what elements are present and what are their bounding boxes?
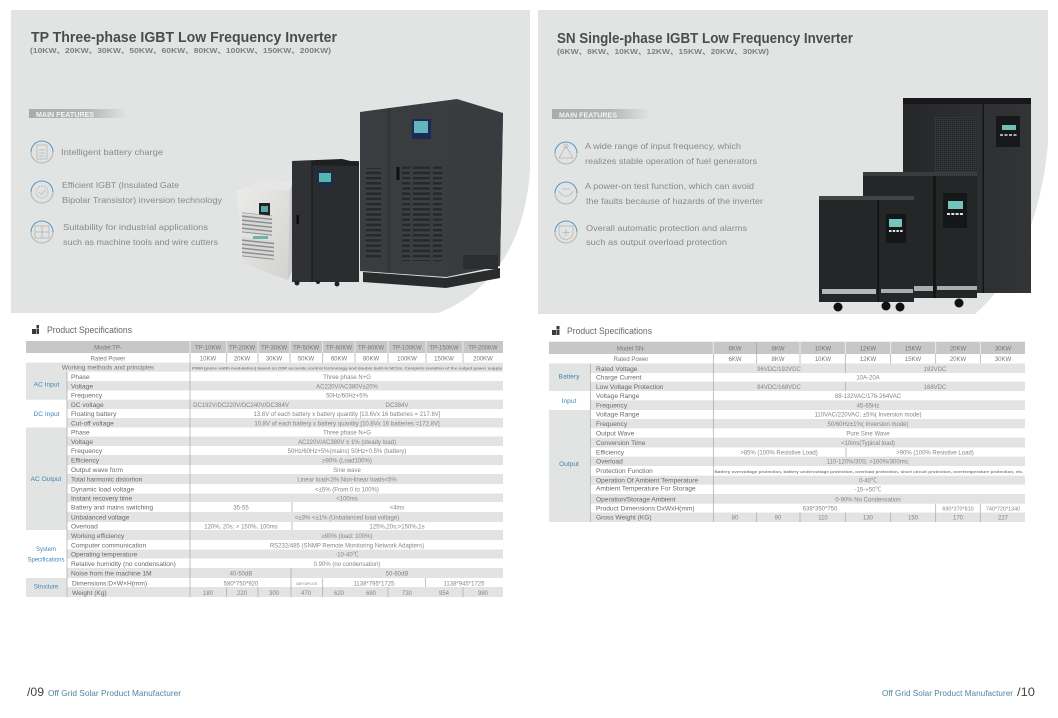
values: TP table: Linear load<3% Non-linear loads<5% bbox=[297, 478, 397, 484]
values: TP table: 980 bbox=[478, 591, 489, 597]
text: feature 3 right: Overall automatic protection and alarms bbox=[586, 223, 747, 233]
table header row: TP models: TP-200KW bbox=[468, 346, 498, 352]
row: rated power: 200KW bbox=[473, 356, 493, 362]
values: TP table: 40-50dB bbox=[230, 572, 252, 578]
text: feature 3 right: such as output overload protection bbox=[586, 237, 727, 247]
values: SN table: -15-+50℃ bbox=[855, 486, 881, 494]
row: rated power SN: 20KW bbox=[950, 357, 967, 363]
panel: TP three-phase inverter hero bbox=[11, 10, 530, 313]
group label: Input: Input bbox=[562, 398, 576, 405]
panel: SN single-phase inverter hero bbox=[538, 10, 1048, 314]
values: SN table: 96VDC/192VDC bbox=[757, 367, 802, 373]
text: feature 2 right: the faults because of hazards of the inverter bbox=[586, 196, 763, 206]
item labels: TP table: Efficiency bbox=[71, 458, 100, 464]
row: rated power SN: 15KW bbox=[905, 357, 922, 363]
values: SN table: Pure Sine Wave bbox=[846, 432, 890, 438]
item labels: TP table: DC voltage bbox=[71, 402, 104, 409]
values: TP table: AC220V/AC380V±20% bbox=[316, 384, 378, 390]
item labels: TP table: Computer communication bbox=[71, 542, 146, 550]
values: TP table: 470 bbox=[301, 591, 312, 597]
values: SN table: 150 bbox=[908, 516, 919, 522]
subtitle: SN power range: (6KW、8KW、10KW、12KW、15KW、20KW、30KW) bbox=[557, 47, 770, 56]
image: medium black inverter bbox=[863, 172, 977, 308]
text: feature 1 right: realizes stable operation of fuel generators bbox=[585, 156, 757, 166]
item labels: TP table: Weight (Kg) bbox=[72, 590, 107, 597]
item labels: TP table: Voltage bbox=[71, 439, 93, 446]
table header row: TP models bbox=[26, 341, 503, 353]
item labels: SN table: Conversion Time bbox=[596, 440, 646, 447]
table header row: SN models: 30KW bbox=[995, 346, 1012, 352]
item labels: SN table: Efficiency bbox=[596, 450, 625, 456]
text: feature 2: Efficient IGBT (Insulated Gate bbox=[62, 180, 179, 190]
item labels: TP table: Working efficiency bbox=[71, 533, 125, 540]
panel background: left bbox=[11, 10, 530, 313]
values: SN table: 45-65Hz bbox=[857, 404, 879, 410]
values: SN table: 0-90% No Condensation bbox=[835, 498, 901, 504]
heading: product specifications left: Product Specifications bbox=[47, 325, 132, 335]
footer: right page number and tagline: Off Grid Solar Product Manufacturer bbox=[882, 689, 1013, 698]
group label: System Specifications bbox=[27, 547, 65, 564]
values: TP table: <±5% (From 0 to 100%) bbox=[315, 488, 379, 494]
values: SN table: 110 bbox=[818, 516, 828, 522]
text: feature 2 bbox=[62, 180, 223, 205]
values: TP table: Sine wave bbox=[333, 468, 362, 474]
group label: AC Input: AC Input bbox=[34, 382, 59, 388]
values: SN table: 0-40℃ bbox=[859, 478, 877, 484]
table header row: SN models: Model SN- bbox=[617, 346, 645, 352]
values: TP table: 1138*945*1725 bbox=[444, 582, 485, 588]
footer: right page number and tagline: /10 bbox=[1017, 685, 1035, 699]
table header row: SN models bbox=[549, 342, 1025, 354]
item labels: SN table: Frequency bbox=[596, 421, 628, 428]
values: TP table: 954 bbox=[439, 591, 450, 597]
group label: Output: Output bbox=[559, 461, 579, 468]
item labels: TP table: Battery and mains switching bbox=[71, 504, 153, 512]
values: TP table: 620 bbox=[334, 591, 345, 597]
item labels: TP table: Phase bbox=[71, 374, 90, 381]
values: TP table: 730 bbox=[402, 591, 413, 597]
values: TP table: ≥90% (load: 100%) bbox=[322, 534, 372, 540]
item labels: TP table: Frequency bbox=[71, 448, 103, 455]
table header row: SN models: 8KW bbox=[771, 346, 785, 352]
group label: AC Output: AC Output bbox=[31, 476, 62, 483]
panel background: right bbox=[538, 10, 1048, 314]
values: TP table: 35-55 bbox=[233, 506, 249, 512]
group label: System Specifications: System bbox=[36, 547, 56, 553]
item labels: TP table: Total harmonic distortion bbox=[71, 476, 143, 484]
table header row: TP models: TP-30KW bbox=[261, 346, 287, 352]
text: feature 2 right: A power-on test function, which can avoid bbox=[585, 181, 754, 191]
values: TP table bbox=[193, 375, 489, 597]
icon: battery charge bbox=[31, 141, 53, 163]
values: SN table: 130 bbox=[863, 516, 874, 522]
values: SN table: 80 bbox=[732, 516, 739, 522]
item labels: SN table: Operation Of Ambient Temperature bbox=[596, 478, 698, 484]
item labels: SN table: Voltage Range bbox=[596, 393, 640, 400]
item labels: TP table: Unbalanced voltage bbox=[71, 514, 130, 522]
table: SN specifications bbox=[549, 342, 1025, 522]
values: SN table: Battery overvoltage protection, battery undervoltage protection, overload protection, short circuit protection, overtemperature protection, etc. bbox=[714, 469, 1024, 474]
row: rated power SN: 10KW bbox=[815, 357, 832, 363]
item labels: SN table bbox=[596, 366, 698, 522]
item labels: TP table: Phase bbox=[71, 430, 90, 436]
item labels: TP table: Voltage bbox=[71, 383, 93, 390]
heading: product specifications right: Product Specifications bbox=[567, 326, 652, 336]
values: SN table: 227 bbox=[998, 516, 1009, 522]
item labels: TP table: Relative humidity (no condensation) bbox=[71, 561, 176, 568]
item labels: TP table: Operating temperature bbox=[71, 552, 138, 558]
table header row: TP models: TP-50KW bbox=[293, 346, 319, 352]
row: rated power: 150KW bbox=[434, 356, 454, 362]
row: rated power: 10KW bbox=[200, 356, 217, 362]
footer: right page number and tagline bbox=[882, 685, 1035, 699]
values: TP table: 50Hz/60Hz+5%(mains) 50Hz+0.5% (battery) bbox=[288, 449, 406, 455]
title: SN inverter: SN Single-phase IGBT Low Frequency Inverter bbox=[557, 30, 853, 47]
row: rated power: 80KW bbox=[363, 356, 380, 362]
values: TP table: 180 bbox=[203, 591, 214, 597]
values: TP table: Three phase N+G bbox=[323, 375, 371, 381]
values: SN table bbox=[714, 367, 1024, 522]
item labels: SN table: Low Voltage Protection bbox=[596, 384, 664, 391]
text: feature 1 right bbox=[585, 141, 757, 166]
table header row: SN models: 6KW bbox=[728, 346, 742, 352]
values: TP table: 580*750*920 bbox=[224, 582, 259, 588]
row: rated power SN: 6KW bbox=[728, 357, 742, 363]
values: SN table: 110VAC/220VAC; ±5%( Inversion mode) bbox=[814, 412, 922, 418]
text: feature 3: Suitability for industrial applications bbox=[63, 222, 208, 232]
heading: main features right: MAIN FEATURES bbox=[559, 112, 617, 119]
icon: gear bbox=[31, 181, 53, 203]
group label: System Specifications: Specifications bbox=[27, 558, 65, 564]
values: SN table: 110-120%/30S; >160%/300ms; bbox=[827, 460, 910, 466]
values: TP table: Three phase N+G bbox=[323, 430, 371, 436]
footer: left page number and tagline bbox=[27, 685, 181, 699]
item labels: SN table: Voltage Range bbox=[596, 412, 640, 418]
heading: main features left: MAIN FEATURES bbox=[36, 112, 94, 119]
values: TP table: <±3% <±1% (Unbalanced load voltage) bbox=[295, 516, 399, 522]
row: rated power: 50KW bbox=[298, 356, 315, 362]
text: feature 3: such as machine tools and wire cutters bbox=[63, 237, 218, 247]
item labels: TP table: Instant recovery time bbox=[71, 496, 133, 502]
table header row: SN models: 20KW bbox=[950, 346, 967, 352]
image: small black inverter bbox=[819, 196, 914, 312]
icon: shield bbox=[555, 221, 577, 243]
row: rated power SN: Rated Power bbox=[614, 357, 648, 363]
values: TP table: 300 bbox=[269, 591, 280, 597]
table header row: SN models: 12KW bbox=[860, 346, 877, 352]
item labels: TP table: Dynamic load voltage bbox=[71, 486, 134, 494]
icon: triangle nodes bbox=[555, 142, 577, 164]
table: TP specifications bbox=[26, 341, 503, 597]
values: SN table: 740*720*1340 bbox=[986, 506, 1020, 512]
values: TP table: 0.90% (no condensation) bbox=[314, 562, 380, 568]
values: SN table: 690*370*810 bbox=[942, 506, 974, 512]
row: rated power: 30KW bbox=[266, 356, 283, 362]
values: SN table: 90 bbox=[775, 516, 782, 522]
row: rated power: Rated Power bbox=[91, 356, 125, 362]
values: TP table: 125%,20s;>150%,1s bbox=[369, 524, 425, 530]
footer: left page number and tagline: /09 bbox=[27, 685, 44, 699]
icon: industrial bbox=[31, 221, 53, 243]
item labels: SN table: Rated Voltage bbox=[596, 366, 638, 373]
row: rated power bbox=[91, 353, 493, 363]
subtitle: TP power range: (10KW、20KW、30KW、50KW、60KW、80KW、100KW、150KW、200KW) bbox=[30, 46, 332, 55]
table header row: TP models: TP-20KW bbox=[229, 346, 255, 352]
text: feature 3 bbox=[63, 222, 218, 247]
table header row: SN models: 10KW bbox=[815, 346, 832, 352]
row: working methods bbox=[26, 363, 503, 372]
row: rated power SN: 12KW bbox=[860, 357, 877, 363]
values: TP table: 680 bbox=[366, 591, 377, 597]
values: TP table: 10.8V of each battery x battery quantity [10.8Vx 16 batteries =172.8V] bbox=[254, 422, 440, 428]
row: rated power: 60KW bbox=[331, 356, 348, 362]
item labels: SN table: Gross Weight (KG) bbox=[596, 515, 652, 522]
group backgrounds and alternating rows SN bbox=[549, 354, 1025, 522]
item labels: TP table: Cut-off voltage bbox=[71, 420, 114, 428]
table header row: SN models: 15KW bbox=[905, 346, 922, 352]
table header row: TP models: TP-150KW bbox=[429, 346, 459, 352]
item labels: TP table bbox=[71, 374, 176, 597]
image: large dark grey inverter cabinet bbox=[360, 99, 503, 288]
footer: left page number and tagline: Off Grid Solar Product Manufacturer bbox=[48, 689, 181, 698]
heading: main features right bbox=[552, 109, 650, 119]
values: SN table: 638*350*750 bbox=[803, 506, 838, 512]
values: SN table: 50/60Hz±1%( Inversion mode) bbox=[828, 422, 908, 428]
values: SN table: <10ms(Typical load) bbox=[841, 441, 895, 447]
table header row: TP models: Model:TP- bbox=[94, 346, 122, 352]
values: TP table: AC220V/AC380V ± 1% (steady load) bbox=[298, 440, 396, 446]
values: TP table: -10-40℃ bbox=[335, 552, 359, 558]
values: SN table: 168VDC bbox=[924, 385, 947, 391]
heading: main features left bbox=[29, 109, 127, 119]
row: working methods: Working methods and principles bbox=[62, 364, 155, 372]
values: TP table: 220 bbox=[237, 591, 248, 597]
row: rated power SN: 8KW bbox=[771, 357, 785, 363]
values: TP table: 1138*795*1725 bbox=[354, 582, 395, 588]
group label: Battery: Battery bbox=[559, 374, 580, 380]
title: TP inverter: TP Three-phase IGBT Low Frequency Inverter bbox=[31, 29, 337, 46]
text: feature 2 right bbox=[585, 181, 763, 206]
row: rated power: 20KW bbox=[234, 356, 251, 362]
values: SN table: 88-132VAC/176-264VAC bbox=[835, 394, 902, 400]
values: TP table: DC384V bbox=[386, 403, 408, 409]
values: TP table: 50-60dB bbox=[386, 572, 408, 578]
values: SN table: 192VDC bbox=[924, 367, 947, 373]
text: feature 3 right bbox=[586, 223, 747, 247]
item labels: SN table: Charge Current bbox=[596, 374, 642, 382]
values: TP table: 120%, 20s; > 150%, 100ms bbox=[204, 524, 278, 530]
text: feature 2: Bipolar Transistor) inversion technology bbox=[62, 195, 223, 205]
values: SN table: >85% (100% Resistive Load) bbox=[740, 450, 818, 456]
item labels: TP table: Dimensions:D×W×H(mm) bbox=[72, 580, 147, 588]
values: TP table: 13.6V of each battery x battery quantity [13.6Vx 16 batteries = 217.6V] bbox=[254, 412, 441, 418]
image: large black inverter bbox=[903, 98, 1031, 293]
item labels: SN table: Protection Function bbox=[596, 468, 653, 475]
values: TP table: <4ms bbox=[390, 506, 404, 512]
item labels: TP table: Frequency bbox=[71, 392, 103, 400]
values: SN table: 170 bbox=[953, 516, 964, 522]
values: TP table: 408*728*1475 bbox=[296, 582, 317, 586]
table header row: TP models: TP-100KW bbox=[392, 346, 422, 352]
text: feature 1: Intelligent battery charge bbox=[61, 147, 163, 157]
row: rated power: 100KW bbox=[397, 356, 417, 362]
item labels: SN table: Ambient Temperature For Storage bbox=[596, 486, 696, 492]
values: TP table: 50Hz/60Hz+5% bbox=[326, 394, 369, 400]
group label: Structure: Structure bbox=[34, 584, 59, 590]
values: SN table: >90% (100% Resistive Load) bbox=[896, 450, 974, 456]
values: SN table: 84VDC/168VDC bbox=[757, 385, 802, 391]
item labels: SN table: Product Dimensions:DxWxH(mm) bbox=[596, 505, 695, 512]
icon: test function bbox=[555, 182, 577, 204]
text: feature 1 right: A wide range of input frequency, which bbox=[585, 141, 741, 151]
item labels: SN table: Output Wave bbox=[596, 430, 635, 438]
group label: DC Input: DC Input bbox=[33, 411, 60, 418]
row: rated power SN bbox=[614, 354, 1012, 364]
table header row: TP models: TP-10KW bbox=[195, 346, 221, 352]
values: SN table: 10A-20A bbox=[856, 376, 880, 382]
item labels: TP table: Noise from the machine 1M bbox=[71, 570, 152, 578]
table header row: TP models: TP-80KW bbox=[358, 346, 384, 352]
item labels: TP table: Overload bbox=[71, 524, 98, 530]
values: TP table: ≥90% (Load100%) bbox=[322, 458, 372, 464]
values: TP table: <100ms bbox=[336, 496, 358, 502]
item labels: TP table: Output wave form bbox=[71, 467, 124, 474]
group backgrounds and alternating rows bbox=[26, 353, 503, 597]
row: working methods: PWM (pulse width modulation) based on DSP accurate control technology and double built-in MCUs. Complete isolation of the output power supply bbox=[192, 366, 503, 370]
item labels: SN table: Frequency bbox=[596, 402, 628, 410]
image: white inverter cabinet bbox=[236, 180, 293, 280]
values: TP table: RS232/485 (SNMP Remote Monitoring Network Adapters) bbox=[270, 544, 424, 550]
item labels: SN table: Operation/Storage Ambient bbox=[596, 496, 676, 504]
values: TP table: DC192V/DC220V/DC240V/DC384V bbox=[193, 403, 289, 409]
image: medium black inverter cabinet bbox=[292, 159, 359, 286]
item labels: SN table: Overload bbox=[596, 459, 623, 466]
item labels: TP table: Floating battery bbox=[71, 411, 117, 418]
table header row: TP models: TP-60KW bbox=[326, 346, 352, 352]
row: rated power SN: 30KW bbox=[995, 357, 1012, 363]
